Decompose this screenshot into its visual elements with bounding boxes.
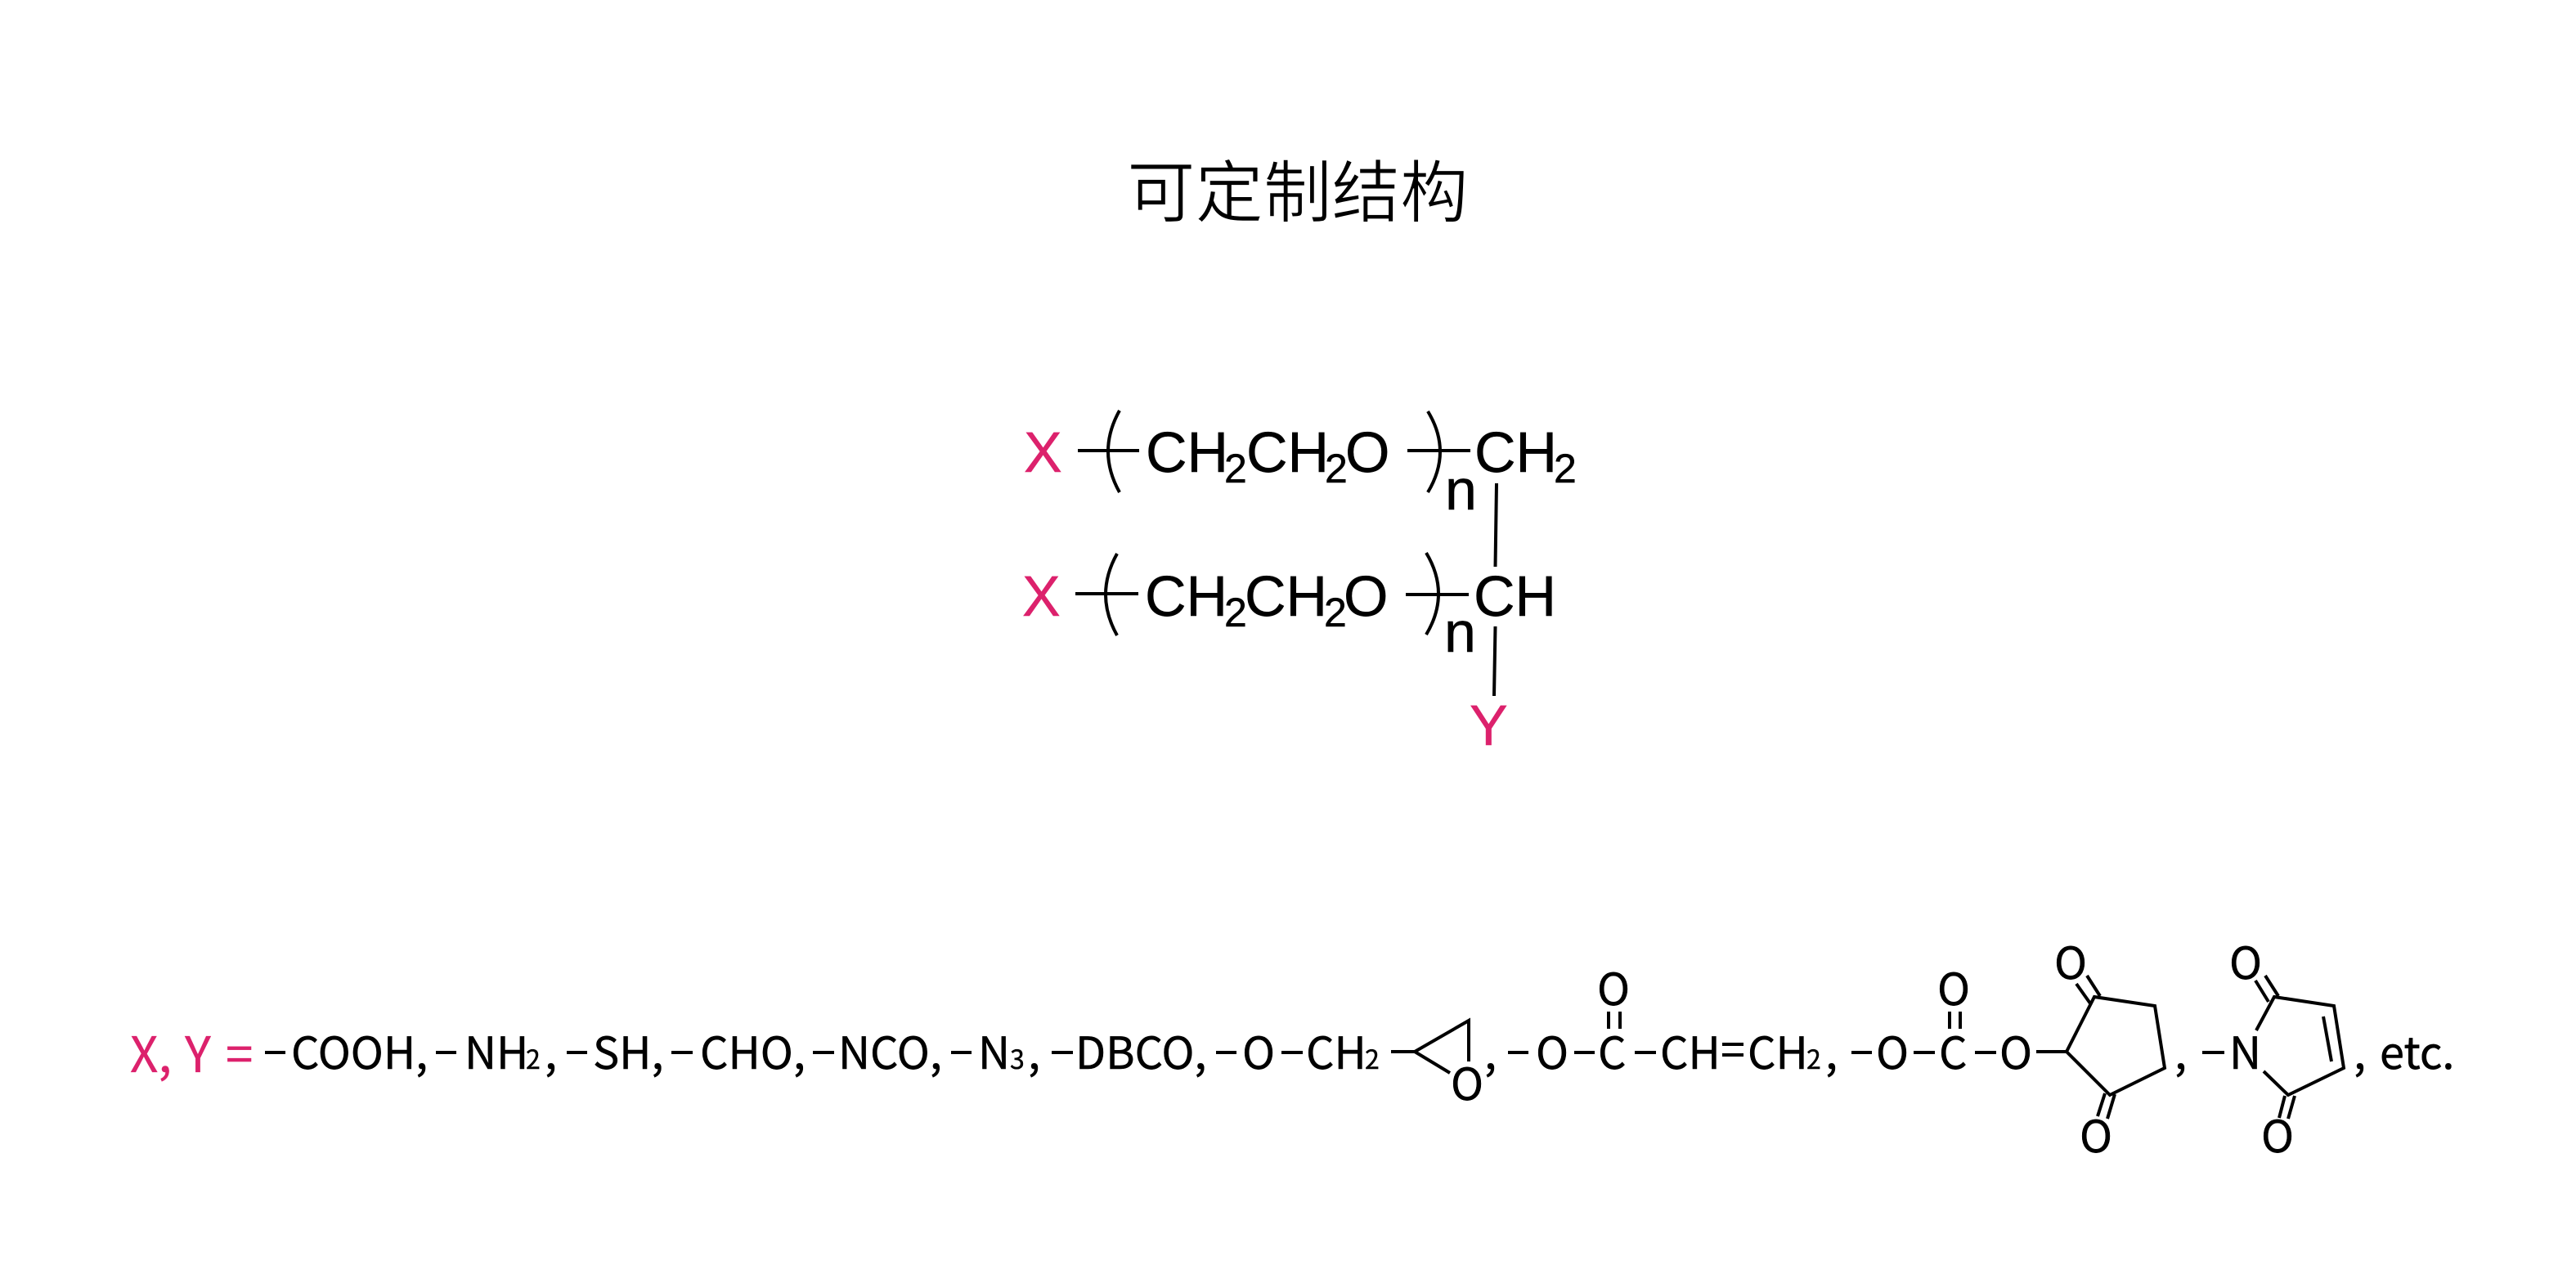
group: acrylate: , bbox=[1825, 1017, 1838, 1082]
upper chain: X-(CH2CH2O)n-CH2 bbox=[1024, 411, 1577, 522]
group: maleimide: N bbox=[2229, 1017, 2261, 1082]
group: acrylate: CH bbox=[1748, 1017, 1808, 1082]
group: O-CH2 epoxide: O bbox=[1451, 1048, 1483, 1113]
group: maleimide bbox=[2202, 927, 2366, 1165]
label: X, Y =: = bbox=[226, 1016, 253, 1087]
group: NHS carbonate: C bbox=[1939, 1017, 1967, 1082]
etc.: etc. bbox=[2380, 1017, 2454, 1082]
group: NHS carbonate: , bbox=[2174, 1017, 2187, 1082]
group: NHS carbonate: O bbox=[2080, 1101, 2112, 1165]
group: COOH: COOH, bbox=[291, 1017, 428, 1082]
group: NH2 bbox=[436, 1017, 557, 1082]
group: NHS carbonate: O bbox=[2054, 927, 2087, 992]
lower chain: X-(CH2CH2O)n-CH bbox=[1022, 553, 1556, 664]
lower chain: X-(CH2CH2O)n-CH: 2 bbox=[1324, 590, 1347, 635]
group: N3 bbox=[951, 1017, 1040, 1082]
lower chain: X-(CH2CH2O)n-CH: X bbox=[1022, 564, 1061, 628]
group: acrylate: C bbox=[1598, 1017, 1626, 1082]
group: O-CH2 epoxide: CH bbox=[1306, 1017, 1367, 1082]
group: NH2: , bbox=[545, 1017, 557, 1082]
group: acrylate: O bbox=[1536, 1017, 1568, 1082]
lower chain: X-(CH2CH2O)n-CH: 2 bbox=[1224, 590, 1247, 635]
upper chain: X-(CH2CH2O)n-CH2: O bbox=[1345, 420, 1389, 484]
group: CHO: CHO, bbox=[700, 1017, 806, 1082]
upper chain: X-(CH2CH2O)n-CH2: 2 bbox=[1224, 446, 1247, 491]
upper chain: X-(CH2CH2O)n-CH2: 2 bbox=[1554, 446, 1577, 491]
group: N3: 3 bbox=[1010, 1039, 1025, 1077]
upper chain: X-(CH2CH2O)n-CH2: CH bbox=[1474, 420, 1557, 484]
group: maleimide: , bbox=[2354, 1017, 2366, 1082]
upper chain: X-(CH2CH2O)n-CH2: n bbox=[1445, 458, 1477, 522]
group: acrylate: CH bbox=[1660, 1017, 1721, 1082]
group: NCO: NCO, bbox=[838, 1017, 942, 1082]
group: O-CH2 epoxide: O bbox=[1242, 1017, 1275, 1082]
group: maleimide: O bbox=[2229, 927, 2262, 992]
label: X, Y = bbox=[130, 1016, 253, 1087]
group: acrylate: O bbox=[1597, 954, 1630, 1018]
connecting bond CH2 to CH bbox=[1495, 483, 1497, 567]
bond CH to Y bbox=[1494, 626, 1495, 696]
group: O-CH2 epoxide bbox=[1216, 1017, 1497, 1113]
group: NH2: 2 bbox=[526, 1039, 541, 1077]
group: SH: SH, bbox=[593, 1017, 664, 1082]
group: O-CH2 epoxide: 2 bbox=[1365, 1039, 1380, 1077]
lower chain: X-(CH2CH2O)n-CH: CH bbox=[1474, 564, 1556, 628]
lower chain: X-(CH2CH2O)n-CH: O bbox=[1344, 564, 1388, 628]
group: acrylate bbox=[1508, 954, 1838, 1082]
group: acrylate: 2 bbox=[1806, 1039, 1821, 1077]
group: N3: , bbox=[1028, 1017, 1040, 1082]
label: X, Y =: X, bbox=[130, 1016, 172, 1087]
Y substituent: Y bbox=[1470, 693, 1508, 757]
group: N3: N bbox=[978, 1017, 1010, 1082]
upper chain: X-(CH2CH2O)n-CH2: 2 bbox=[1325, 446, 1348, 491]
title: 可定制结构 bbox=[1127, 138, 1469, 237]
lower chain: X-(CH2CH2O)n-CH: CH bbox=[1245, 564, 1327, 628]
group: NHS carbonate: O bbox=[1876, 1017, 1909, 1082]
group: NHS carbonate bbox=[1851, 927, 2187, 1165]
upper chain: X-(CH2CH2O)n-CH2: CH bbox=[1146, 420, 1228, 484]
group: NHS carbonate: O bbox=[1999, 1017, 2032, 1082]
group: NH2: NH bbox=[464, 1017, 528, 1082]
upper chain: X-(CH2CH2O)n-CH2: X bbox=[1024, 420, 1062, 484]
group: O-CH2 epoxide: , bbox=[1484, 1017, 1497, 1082]
lower chain: X-(CH2CH2O)n-CH: n bbox=[1444, 600, 1476, 664]
group: DBCO: DBCO, bbox=[1075, 1017, 1206, 1082]
lower chain: X-(CH2CH2O)n-CH: CH bbox=[1145, 564, 1227, 628]
group: NHS carbonate: O bbox=[1937, 954, 1970, 1018]
upper chain: X-(CH2CH2O)n-CH2: CH bbox=[1246, 420, 1329, 484]
functional groups list bbox=[130, 927, 2454, 1165]
group: maleimide: O bbox=[2261, 1101, 2294, 1165]
label: X, Y =: Y bbox=[184, 1016, 211, 1087]
chemical structure: branched PEG bbox=[1022, 411, 1577, 757]
